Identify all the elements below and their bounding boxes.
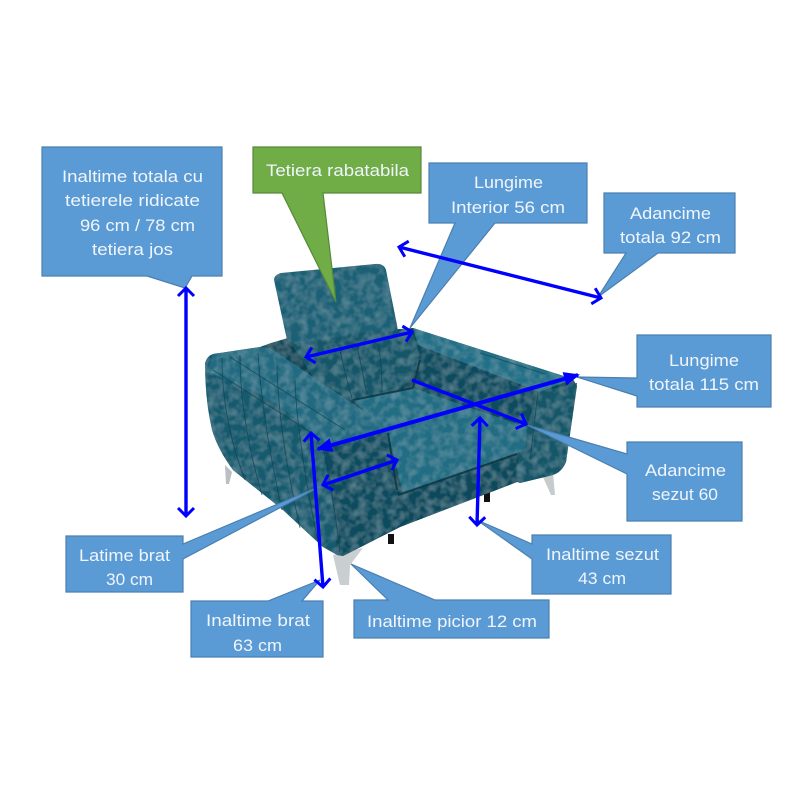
callout: arm width: Latime brat: [79, 546, 170, 565]
chair legs: [225, 465, 555, 585]
callout: seat height: [477, 520, 671, 594]
callout: interior length: Lungime: [474, 173, 543, 192]
callout: interior length: [410, 163, 587, 328]
callout: seat depth: [527, 425, 742, 521]
headrest: [274, 264, 398, 344]
callout: total height: [42, 147, 222, 288]
callout: seat height: 43 cm: [578, 569, 626, 588]
callout: total height: tetiera jos: [92, 240, 173, 259]
callout: arm width: 30 cm: [106, 570, 153, 589]
callout: arm width: [66, 485, 323, 592]
callout: foldable headrest: Tetiera rabatabila: [266, 161, 410, 180]
callout: total height: Inaltime totala cu: [62, 167, 203, 186]
callout: total depth: [598, 193, 735, 297]
arrow: interior length: [306, 332, 412, 357]
arrow: arm height: [311, 433, 323, 587]
callout: total length: Lungime: [669, 351, 739, 370]
upholstery: [205, 264, 577, 556]
arrow: seat height: [477, 418, 480, 525]
callout: foldable headrest: [253, 147, 421, 302]
seat front: [396, 454, 517, 527]
left arm front: [323, 432, 400, 556]
callout: seat height: Inaltime sezut: [546, 545, 659, 564]
arrow: total height: [184, 288, 188, 516]
callout: total length: totala 115 cm: [649, 375, 759, 394]
callout: total depth: totala 92 cm: [620, 228, 721, 247]
arrow: total length: [318, 375, 578, 449]
callout: leg height: [351, 564, 549, 638]
callout: total height: 96 cm / 78 cm: [80, 216, 195, 235]
callout: arm height: 63 cm: [233, 636, 282, 655]
chair base silhouette: [205, 328, 577, 556]
seat top: [353, 388, 527, 493]
armchair: [205, 264, 577, 585]
arrow: seat depth: [412, 380, 526, 424]
callout: total length: [577, 335, 771, 407]
left arm side: [205, 347, 400, 556]
seams: [213, 343, 545, 552]
callout: seat depth: Adancime: [645, 461, 726, 480]
callout: seat depth: sezut 60: [652, 485, 718, 504]
callout: total depth: Adancime: [630, 204, 711, 223]
right arm inner side: [413, 345, 535, 425]
callout: interior length: Interior 56 cm: [451, 198, 565, 217]
callout: total height: tetierele ridicate: [65, 191, 200, 210]
right arm front: [514, 383, 577, 483]
right arm top: [413, 328, 573, 392]
arrow: total depth: [399, 247, 601, 298]
left arm top: [207, 347, 387, 447]
callout: arm height: [191, 580, 323, 657]
back cushion: [292, 330, 419, 400]
callout: leg height: Inaltime picior 12 cm: [367, 612, 537, 631]
callout: arm height: Inaltime brat: [206, 611, 310, 630]
arrow: arm width: [323, 460, 397, 485]
